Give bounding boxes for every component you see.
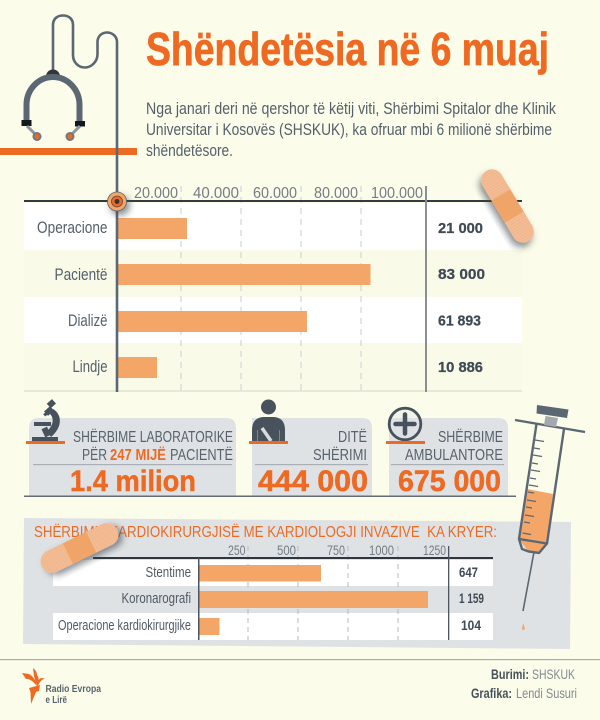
axis labels: 60.000 [253, 185, 297, 202]
panel: ambulatory services [389, 418, 508, 498]
axis labels [134, 185, 423, 202]
source credits [471, 666, 577, 701]
panel: ambulatory services: AMBULANTORE [405, 447, 503, 464]
row values: 647 [459, 564, 478, 580]
intro text: shëndetësore. [146, 142, 233, 160]
icon: plus in circle [389, 408, 421, 440]
bar chart: services [24, 185, 522, 392]
panel: ambulatory services: SHËRBIME [438, 429, 503, 446]
row values: 1 159 [459, 590, 484, 606]
panel: ambulatory services: 675 000 [398, 465, 501, 498]
axis labels: 250 [228, 543, 246, 558]
panel: laboratory services: 247 MIJË [110, 447, 166, 464]
icon: drop [522, 623, 525, 630]
source credits: Grafika: [471, 685, 512, 701]
source credits: Lendi Susuri [516, 685, 577, 701]
panel: laboratory services: 1.4 milion [70, 465, 196, 498]
row values: 10 886 [438, 359, 483, 376]
row labels: Lindje [72, 358, 108, 376]
baseline of KPI panels [24, 496, 516, 497]
axis labels [228, 543, 446, 558]
row labels: Operacione [37, 219, 108, 237]
icon rule: patient [249, 441, 288, 444]
logo text: Radio Evropa [46, 683, 101, 695]
row labels [58, 565, 191, 634]
icon: syringe [515, 405, 585, 611]
panel: treatment days [252, 418, 372, 498]
row values: 104 [461, 617, 481, 633]
axis labels: 100.000 [371, 185, 423, 202]
row labels [37, 219, 108, 376]
icon rule: plus [386, 441, 425, 444]
icon: stethoscope [22, 16, 117, 392]
orange rule [0, 148, 137, 155]
row labels: Koronarografi [122, 591, 191, 607]
panel: treatment days: SHËRIMI [313, 447, 367, 464]
section heading: SHËRBIMI I KARDIOKIRURGJISË ME KARDIOLOGJI INVAZIVE KA KRYER: [34, 523, 497, 541]
panel: treatment days: 444 000 [258, 465, 368, 498]
icon: patient [252, 400, 285, 441]
row labels: Dializë [68, 312, 108, 330]
icon: stethoscope dial [108, 192, 126, 211]
axis labels: 80.000 [314, 185, 358, 202]
row values [459, 564, 484, 633]
source credits: SHSKUK [532, 666, 575, 682]
intro text [146, 100, 557, 160]
panel: cardiac surgery [23, 518, 571, 649]
row labels: Stentime [146, 565, 191, 581]
row values: 21 000 [438, 220, 483, 237]
panel: laboratory services: SHËRBIME LABORATORIKE [73, 429, 233, 446]
panel: laboratory services: PËR [82, 447, 107, 464]
axis labels: 1000 [369, 543, 394, 558]
row values [438, 220, 485, 376]
axis labels: 20.000 [134, 185, 178, 202]
bar chart: cardiac [53, 543, 493, 640]
logo text: e Lirë [46, 694, 67, 706]
icon: logo torch [22, 668, 45, 704]
axis labels: 500 [277, 543, 296, 558]
logo text [46, 683, 101, 706]
panel: treatment days: DITË [338, 429, 367, 446]
footer divider [0, 659, 600, 660]
icon: microscope [32, 399, 60, 442]
row values: 83 000 [438, 266, 485, 283]
source credits: Burimi: [491, 666, 529, 682]
bars [200, 565, 428, 635]
row labels: Operacione kardiokirurgjike [58, 618, 191, 634]
axis labels: 1250 [423, 543, 446, 558]
row labels: Pacientë [54, 266, 108, 284]
panel: laboratory services: PACIENTË [170, 447, 233, 464]
axis labels: 750 [327, 543, 345, 558]
icon rule: laboratory [26, 441, 65, 444]
row values: 61 893 [438, 312, 481, 330]
axis labels: 40.000 [193, 185, 239, 202]
panel: laboratory services [29, 418, 236, 498]
icon: bandage top [477, 165, 538, 247]
bars [118, 218, 370, 378]
icon: bandage bottom [37, 519, 122, 577]
